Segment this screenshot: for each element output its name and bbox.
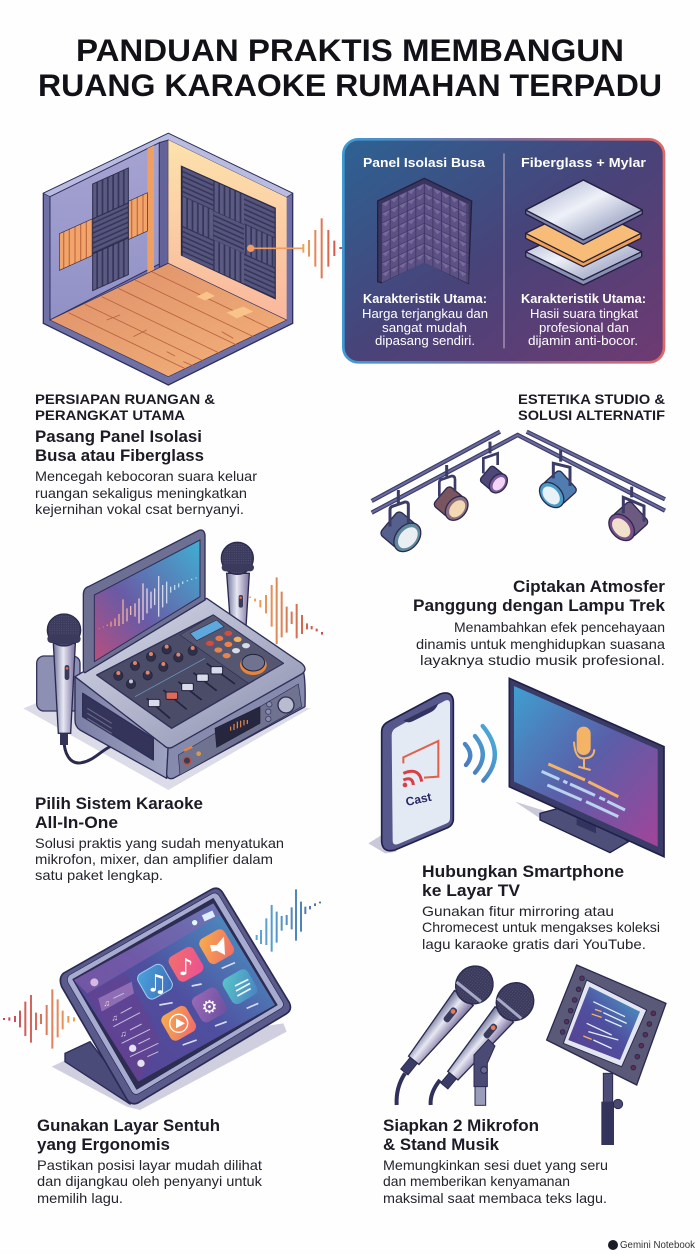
app icons: [135, 927, 260, 1045]
panel text: left column: [362, 155, 488, 348]
sound wave connector: [247, 218, 343, 278]
text block: mikrofon dan stand: [383, 1117, 608, 1206]
text block: smartphone ke TV: [422, 863, 660, 952]
light 3: [479, 453, 511, 496]
text block: smartphone ke TV: lagu karaoke gratis dari YouTube.: [422, 936, 646, 952]
section heading: estetika: ESTETIKA STUDIO &: [518, 392, 665, 407]
panel text: right column: [521, 155, 646, 348]
text block: smartphone ke TV: ke Layar TV: [422, 882, 520, 900]
light 5: [604, 497, 650, 546]
phone: Cast: [404, 790, 433, 809]
text block: panel isolasi: ruangan sekaligus meningkatkan: [35, 485, 247, 501]
mixer controls: [114, 620, 294, 764]
text block: sistem all-in-one: satu paket lengkap.: [35, 867, 163, 883]
text block: panel isolasi: Mencegah kebocoran suara keluar: [35, 468, 257, 484]
panel text: left column: Karakteristik Utama:: [363, 291, 487, 306]
acoustic foam on right wall: [182, 167, 275, 298]
light 2: [432, 476, 473, 525]
text block: layar sentuh: Pastikan posisi layar mudah dilihat: [37, 1157, 262, 1173]
text block: sistem all-in-one: All-In-One: [35, 814, 118, 832]
television: [509, 678, 664, 857]
text block: smartphone ke TV: Gunakan fitur mirroring atau: [422, 903, 614, 919]
panel text: right column: Hasii suara tingkat: [530, 306, 638, 321]
right microphone: [221, 542, 254, 627]
text block: panel isolasi: kejernihan vokal csat bernyanyi.: [35, 501, 244, 517]
title: RUANG KARAOKE RUMAHAN TERPADU: [38, 67, 662, 103]
sound wave: [250, 577, 322, 644]
acoustic foam on left wall: [59, 159, 147, 306]
tablet frame: [60, 888, 290, 1104]
panel text: left column: sangat mudah: [382, 320, 467, 335]
mixer body: [75, 598, 305, 779]
text block: sistem all-in-one: mikrofon, mixer, dan amplifier dalam: [35, 851, 273, 867]
text block: mikrofon dan stand: & Stand Musik: [383, 1136, 500, 1154]
text block: smartphone ke TV: Hubungkan Smartphone: [422, 863, 624, 881]
foam panel icon: [378, 178, 472, 283]
text block: sistem all-in-one: [35, 795, 284, 883]
text block: smartphone ke TV: Chromecest untuk mengakses koleksi: [422, 919, 660, 935]
section heading: estetika: SOLUSI ALTERNATIF: [518, 408, 665, 423]
text block: lampu trek: Ciptakan Atmosfer: [513, 578, 666, 596]
light 4: [535, 463, 578, 512]
light hangers: [398, 442, 632, 505]
text block: mikrofon dan stand: Memungkinkan sesi duet yang seru: [383, 1157, 608, 1173]
left microphone: [47, 614, 110, 763]
panel text: left column: dipasang sendiri.: [375, 333, 475, 348]
illustration: touch screen tablet: ♫: [103, 998, 110, 1008]
title: PANDUAN PRAKTIS MEMBANGUN: [76, 32, 624, 68]
text block: lampu trek: layaknya studio musik profesional.: [420, 652, 665, 668]
text block: lampu trek: Panggung dengan Lampu Trek: [413, 597, 666, 615]
section heading: persiapan: PERSIAPAN RUANGAN &: [35, 392, 215, 407]
panel text: right column: Karakteristik Utama:: [521, 291, 646, 306]
panel text: right column: dijamin anti-bocor.: [528, 333, 638, 348]
text block: layar sentuh: memilih lagu.: [37, 1190, 123, 1206]
music stand: [547, 965, 666, 1145]
text block: lampu trek: [413, 578, 666, 668]
text block: panel isolasi: Pasang Panel Isolasi: [35, 428, 202, 446]
app icons: ⚙: [201, 997, 217, 1018]
sound wave left: [4, 989, 74, 1049]
illustration: touch screen tablet: ♫: [111, 1013, 118, 1023]
microphone 1: [390, 958, 501, 1105]
illustration: isometric treated room: [43, 133, 343, 385]
text block: sistem all-in-one: Solusi praktis yang sudah menyatukan: [35, 835, 284, 851]
text block: panel isolasi: Busa atau Fiberglass: [35, 447, 204, 465]
section heading: persiapan: [35, 392, 215, 423]
illustration: track lights: [372, 432, 665, 557]
mixer screen: [83, 530, 205, 673]
text block: lampu trek: Menambahkan efek pencehayaan: [454, 619, 665, 635]
fiberglass and mylar layers icon: [526, 180, 642, 285]
text block: layar sentuh: dan dijangkau oleh penyanyi untuk: [37, 1173, 263, 1189]
text block: mikrofon dan stand: Siapkan 2 Mikrofon: [383, 1117, 539, 1135]
illustration: touch screen tablet: [4, 888, 320, 1110]
illustration: touch screen tablet: ♫: [120, 1029, 126, 1039]
panel: material comparison: [343, 139, 664, 362]
text block: lampu trek: dinamis untuk menghidupkan suasana: [416, 636, 665, 652]
panel text: left column: Panel Isolasi Busa: [363, 155, 486, 170]
text block: layar sentuh: [37, 1117, 263, 1206]
app icons: ♪: [178, 953, 193, 981]
panel text: right column: profesional dan: [539, 320, 629, 335]
panel text: left column: Harga terjangkau dan: [362, 306, 488, 321]
panel text: right column: Fiberglass + Mylar: [521, 155, 646, 170]
light 1: [379, 502, 426, 557]
watermark: Gemini Notebook: Gemini Notebook: [620, 1240, 696, 1251]
signal arcs: [465, 726, 495, 781]
text block: mikrofon dan stand: maksimal saat membaca teks lagu.: [383, 1190, 607, 1206]
section heading: persiapan: PERANGKAT UTAMA: [35, 408, 185, 423]
microphone 2 and clip: [430, 975, 541, 1105]
phone: [382, 693, 453, 851]
sound wave right: [257, 889, 320, 952]
text block: layar sentuh: Gunakan Layar Sentuh: [37, 1117, 220, 1135]
text block: layar sentuh: yang Ergonomis: [37, 1136, 170, 1154]
illustration: phone casting to TV: [368, 678, 664, 857]
illustration: microphones and music stand: [390, 958, 666, 1145]
illustration: all-in-one karaoke system: [23, 530, 322, 790]
section heading: estetika: [518, 392, 665, 423]
text block: sistem all-in-one: Pilih Sistem Karaoke: [35, 795, 203, 813]
title: [38, 32, 662, 103]
text block: panel isolasi: [35, 428, 257, 517]
app icons: ♫: [146, 970, 168, 998]
text block: mikrofon dan stand: dan memberikan kenyamanan: [383, 1173, 570, 1189]
